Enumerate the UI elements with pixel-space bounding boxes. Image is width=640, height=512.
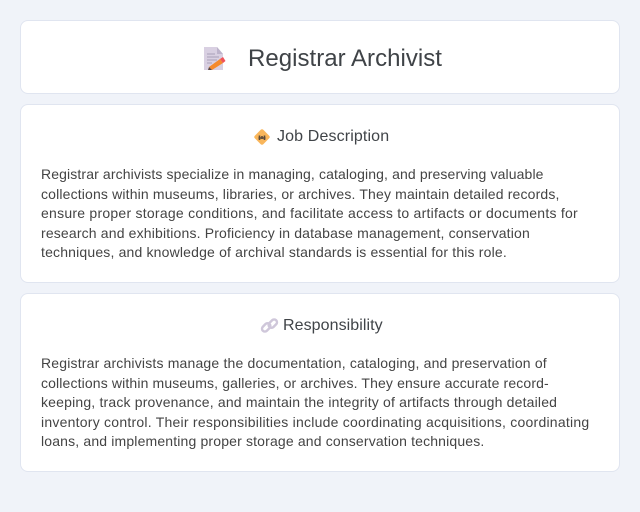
text block: responsibility: inventory control. Their responsibilities include coordinating acquisitions, coordinating bbox=[41, 414, 589, 430]
text block: job description: techniques, and knowledge of archival standards is essential for this role. bbox=[41, 244, 507, 260]
panel: job description bbox=[20, 104, 620, 283]
icon: diamond sign bbox=[254, 129, 270, 145]
text block: responsibility: keeping, track provenance, and maintain the integrity of artifacts through detailed bbox=[41, 394, 557, 410]
heading: job description: Job Description bbox=[277, 128, 389, 145]
text block: job description: collections within museums, libraries, or archives. They maintain detailed records, bbox=[41, 186, 560, 202]
panel: responsibility bbox=[20, 293, 620, 472]
icon: chain link bbox=[260, 318, 278, 333]
heading: responsibility: Responsibility bbox=[283, 317, 383, 334]
text block: responsibility: Registrar archivists manage the documentation, cataloging, and preservation of bbox=[41, 355, 547, 371]
text block: job description: Registrar archivists specialize in managing, cataloging, and preserving valuable bbox=[41, 166, 544, 182]
panel: header bbox=[20, 20, 620, 94]
text block: job description bbox=[41, 166, 578, 260]
text block: job description: research and exhibitions. Proficiency in database management, conservation bbox=[41, 225, 530, 241]
text block: job description: ensure proper storage conditions, and facilitate access to artifacts or documents for bbox=[41, 205, 578, 221]
icon: document with pencil bbox=[204, 47, 226, 70]
title: Registrar Archivist bbox=[248, 45, 442, 72]
text block: responsibility: loans, and implementing proper storage and conservation techniques. bbox=[41, 433, 484, 449]
text block: responsibility: collections within museums, galleries, or archives. They ensure accurate record- bbox=[41, 375, 549, 391]
text block: responsibility bbox=[41, 355, 589, 449]
